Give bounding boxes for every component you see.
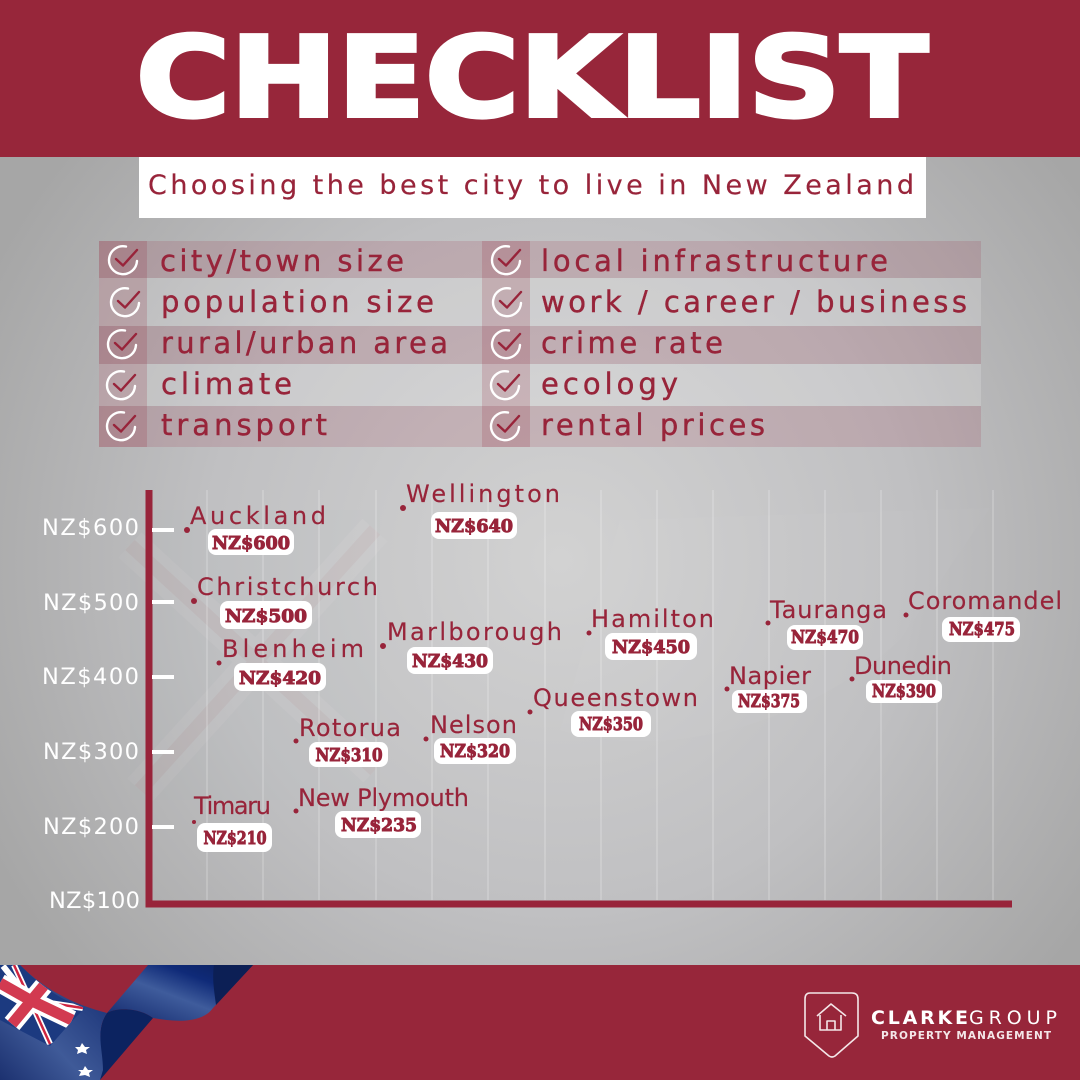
point: Wellington: Wellington [406, 480, 560, 508]
point: Rotorua [294, 714, 401, 767]
point: Christchurch: Christchurch [197, 573, 378, 601]
point: Tauranga: Tauranga [769, 596, 887, 624]
point: Timaru: Timaru [193, 792, 271, 820]
checklist items: work / career / business [541, 285, 967, 319]
point: Marlborough: NZ$430 [412, 651, 488, 672]
point: Rotorua: Rotorua [299, 714, 401, 742]
point: Auckland: Auckland [190, 502, 326, 530]
y-axis labels: NZ$400 [42, 664, 139, 690]
point: Wellington [400, 480, 560, 539]
y-axis labels: NZ$100 [49, 888, 140, 914]
point: Nelson [424, 711, 517, 764]
point: Coromandel: NZ$475 [949, 619, 1015, 640]
point: Auckland [184, 502, 326, 555]
y-axis labels: NZ$300 [43, 739, 139, 765]
checklist items: local infrastructure [541, 244, 888, 278]
header banner [0, 0, 1080, 157]
point: Tauranga [766, 596, 887, 650]
logo wordmark: CLARKE [871, 1007, 968, 1029]
point: Napier [724, 662, 811, 713]
logo tagline: PROPERTY MANAGEMENT [881, 1030, 1052, 1042]
point: Queenstown [528, 684, 698, 737]
checklist items [160, 244, 967, 442]
point: Timaru: NZ$210 [204, 828, 266, 849]
title: CHECKLIST [136, 14, 928, 143]
footer banner [0, 965, 1080, 1080]
point: Rotorua: NZ$310 [316, 745, 382, 766]
point: Coromandel [904, 587, 1062, 642]
subtitle box: Choosing the best city to live in New Zealand [148, 170, 914, 201]
y-axis labels [42, 515, 140, 914]
checklist items: crime rate [541, 326, 723, 360]
checklist items: transport [161, 408, 327, 442]
point: Wellington: NZ$640 [435, 516, 513, 537]
point: Tauranga: NZ$470 [791, 627, 859, 648]
point: Christchurch [191, 573, 378, 629]
point: Auckland: NZ$600 [212, 533, 290, 554]
point: Dunedin [850, 652, 952, 703]
y-axis labels: NZ$600 [42, 515, 139, 541]
checklist items: city/town size [160, 244, 404, 278]
y-axis labels: NZ$500 [43, 590, 139, 616]
point: Napier: Napier [729, 662, 811, 690]
row bands [99, 241, 981, 447]
checklist items: rural/urban area [161, 326, 448, 360]
point: Nelson: NZ$320 [440, 741, 510, 762]
grid lines [207, 490, 993, 900]
axes [149, 490, 1012, 904]
ghost flag watermark [130, 508, 990, 800]
point: Queenstown: NZ$350 [579, 714, 643, 735]
point: New Plymouth [294, 784, 469, 838]
logo: Clarke Group: GROUP [969, 1007, 1057, 1029]
point: Timaru [192, 792, 272, 852]
point: Christchurch: NZ$500 [225, 606, 307, 627]
point: Coromandel: Coromandel [908, 587, 1062, 615]
checklist items: rental prices [541, 408, 765, 442]
icon: New Zealand flag ribbon [0, 965, 253, 1080]
point: Blenheim: Blenheim [222, 635, 364, 663]
point: Dunedin: Dunedin [854, 652, 952, 680]
point: Dunedin: NZ$390 [872, 681, 936, 702]
point: New Plymouth: New Plymouth [298, 784, 469, 812]
point: Blenheim: NZ$420 [239, 668, 321, 689]
point: Hamilton: Hamilton [591, 605, 714, 633]
point: Blenheim [216, 635, 364, 691]
panel: checklist [99, 241, 981, 447]
y-axis ticks [152, 528, 174, 829]
checklist items: population size [161, 285, 434, 319]
chart: rental prices by city [42, 480, 1062, 914]
point: Hamilton: NZ$450 [612, 637, 690, 658]
point: Napier: NZ$375 [738, 691, 800, 712]
subtitle box [139, 157, 926, 218]
icon: check marks [107, 246, 521, 440]
point: Queenstown: Queenstown [533, 684, 698, 712]
point: Marlborough: Marlborough [387, 618, 562, 646]
icon: house shield [805, 993, 858, 1057]
y-axis labels: NZ$200 [43, 814, 139, 840]
point: Hamilton [586, 605, 714, 660]
logo: Clarke Group [805, 993, 1057, 1057]
point: Nelson: Nelson [430, 711, 517, 739]
point: New Plymouth: NZ$235 [341, 815, 417, 836]
point: Marlborough [380, 618, 562, 674]
checklist items: ecology [541, 367, 678, 401]
checklist items: climate [161, 367, 292, 401]
